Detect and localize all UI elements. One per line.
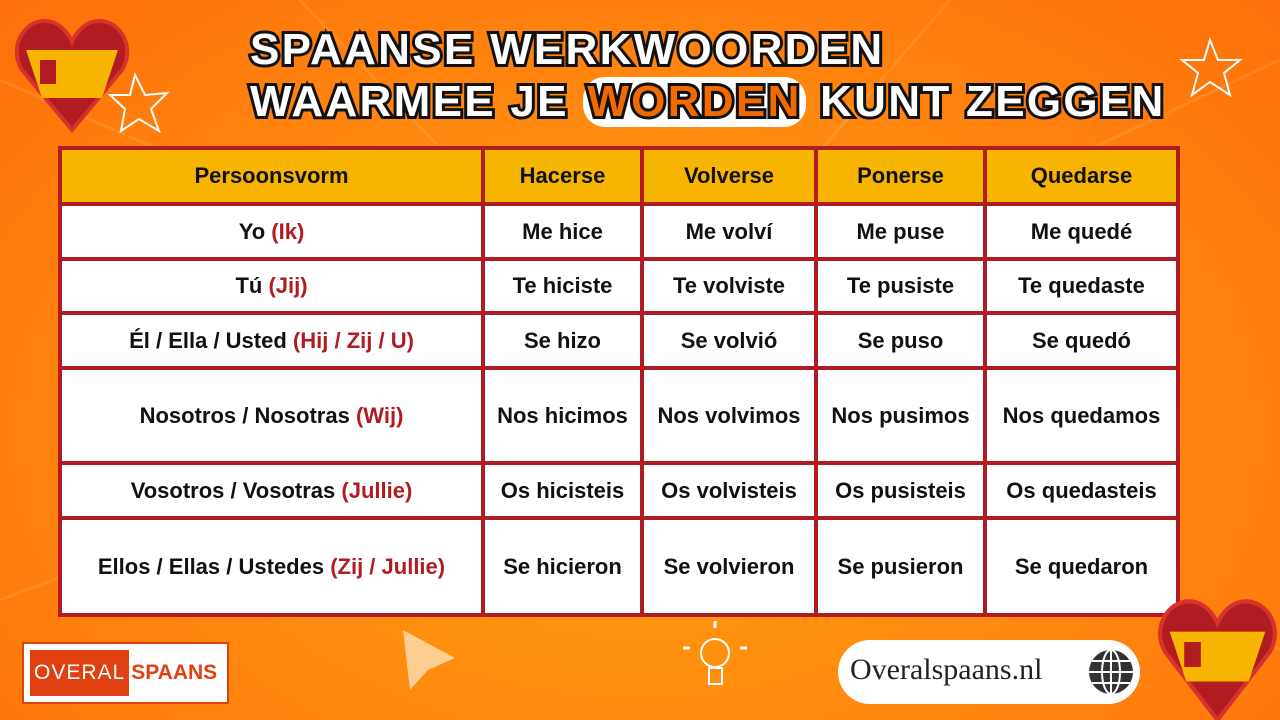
table: Él / Ella / Usted — [129, 328, 287, 352]
icon: star top-left — [108, 72, 170, 134]
title: WORDEN — [587, 77, 802, 126]
table: (Zij / Jullie) — [330, 554, 445, 578]
table: Me hice — [522, 218, 603, 244]
logo: Overal Spaans: OVERAL — [34, 661, 125, 684]
icon: heart flag top-left — [14, 19, 130, 133]
title: WAARMEE JE KUNT ZEGGEN — [250, 77, 1166, 126]
table: Yo — [239, 218, 265, 244]
table: Hacerse — [520, 163, 605, 188]
table: Nos hicimos — [497, 402, 628, 428]
table: (Wij) — [356, 402, 403, 428]
table: Me quedé — [1031, 218, 1132, 244]
table: Os volvisteis — [661, 478, 797, 502]
table: Te hiciste — [513, 273, 612, 298]
table: Se puso — [858, 328, 943, 352]
table: Vosotros / Vosotras — [131, 478, 335, 502]
table: (Jij) — [268, 273, 308, 298]
table: Me puse — [856, 218, 945, 244]
table: Me volví — [686, 218, 772, 244]
table: Os quedasteis — [1006, 478, 1157, 502]
table: Ellos / Ellas / Ustedes — [98, 554, 324, 578]
table: Ponerse — [857, 163, 944, 188]
table: Persoonsvorm — [194, 163, 349, 188]
table: Os hicisteis — [501, 478, 624, 502]
icon: heart flag bottom-right — [1158, 599, 1277, 720]
icon: star top-right — [1180, 37, 1243, 98]
table: Se volvieron — [664, 554, 794, 578]
table: Se volvió — [681, 328, 777, 352]
table: Nosotros / Nosotras — [140, 402, 350, 428]
table: Te quedaste — [1018, 273, 1145, 298]
table: Se quedó — [1032, 328, 1131, 352]
table: Volverse — [684, 163, 774, 188]
title: SPAANSE WERKWOORDEN — [250, 25, 884, 74]
table: Te volviste — [673, 273, 785, 298]
table: Tú — [235, 273, 262, 298]
table: Se hizo — [524, 328, 601, 352]
table: (Hij / Zij / U) — [293, 328, 414, 352]
website badge — [838, 640, 1140, 704]
table: Se pusieron — [838, 554, 963, 578]
icon: globe — [1089, 650, 1133, 694]
table: Se hicieron — [503, 554, 622, 578]
logo: Overal Spaans — [22, 642, 229, 704]
table: Os pusisteis — [835, 478, 966, 502]
table: Nos pusimos — [831, 402, 970, 428]
icon: paper plane — [403, 630, 455, 690]
table: Nos quedamos — [1003, 402, 1160, 428]
website badge: Overalspaans.nl — [850, 653, 1042, 686]
table: Quedarse — [1031, 163, 1132, 188]
title — [246, 25, 1166, 127]
table: Te pusiste — [847, 273, 954, 298]
icon: light bulb — [683, 621, 747, 685]
logo: Overal Spaans: SPAANS — [131, 661, 217, 684]
table: Se quedaron — [1015, 554, 1148, 578]
table — [58, 146, 1180, 617]
table: (Ik) — [271, 218, 304, 244]
table: Nos volvimos — [657, 402, 801, 428]
table: (Jullie) — [341, 478, 412, 502]
